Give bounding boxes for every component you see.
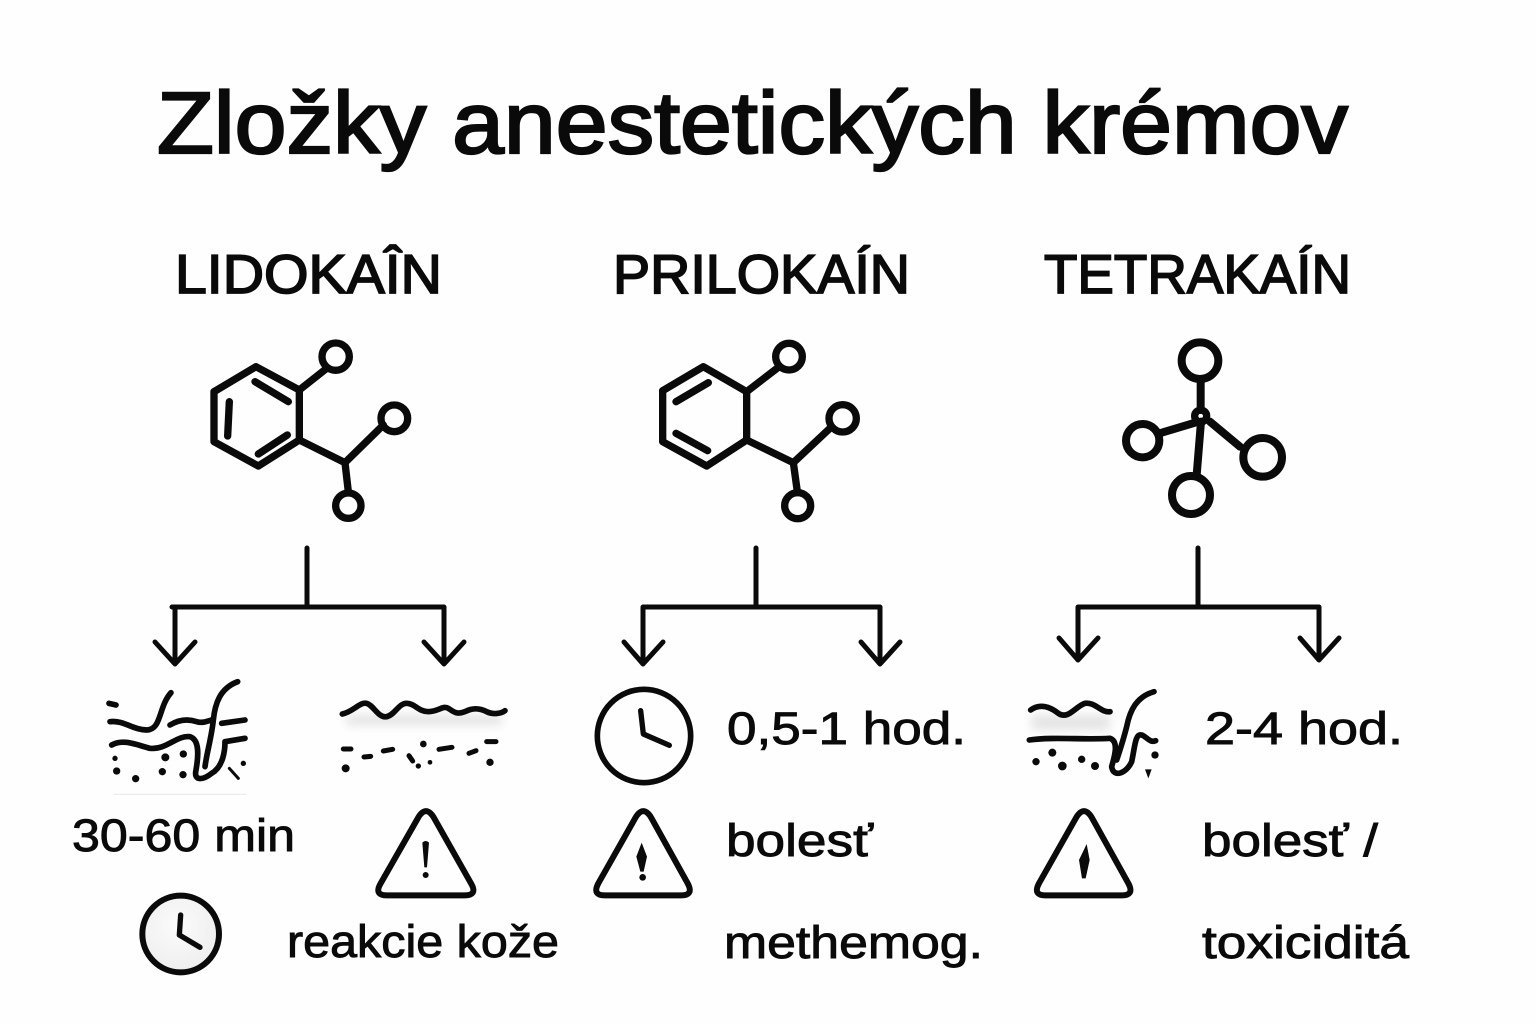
label: tetrakaín onset: 2-4 hod. [1205, 703, 1403, 754]
heading: prilokaín: PRILOKAÍN [613, 243, 910, 305]
heading: lidokaín: LIDOKAÎN [175, 243, 442, 305]
icon: skin with hair follicle [109, 682, 247, 794]
arrows: tetrakaín branches [1059, 548, 1339, 660]
icon: prilokaín molecule [663, 343, 856, 519]
heading: tetrakaín: TETRAKAÍN [1044, 243, 1351, 305]
icon: warning triangle [378, 811, 473, 895]
icon: clock [142, 896, 219, 972]
panel: tetrakaín [1029, 243, 1410, 968]
arrows: prilokaín branches [624, 548, 900, 664]
icon: irritated skin [342, 703, 505, 772]
icon: clock [597, 689, 691, 783]
title: Zložky anestetických krémov [157, 75, 1349, 172]
arrows: lidokaín branches [155, 548, 464, 664]
label: prilokaín side effect: methemog. [724, 917, 983, 968]
icon: skin with hair follicle [1029, 692, 1159, 778]
icon: warning triangle [1037, 811, 1130, 895]
panel: lidokaín [72, 243, 559, 972]
label: lidokaín onset: 30-60 min [72, 810, 295, 861]
label: tetrakaín side effect: toxiciditá [1202, 917, 1410, 968]
icon: warning triangle [596, 811, 690, 895]
label: prilokaín onset: 0,5-1 hod. [727, 703, 966, 754]
icon: lidokaín molecule [214, 343, 408, 518]
panel: prilokaín [596, 243, 983, 968]
label: tetrakaín pain: bolesť / [1202, 815, 1379, 866]
label: lidokaín side effect: reakcie kože [287, 916, 559, 967]
icon: tetrakaín molecule [1126, 342, 1282, 514]
label: prilokaín pain: bolesť [726, 815, 874, 866]
